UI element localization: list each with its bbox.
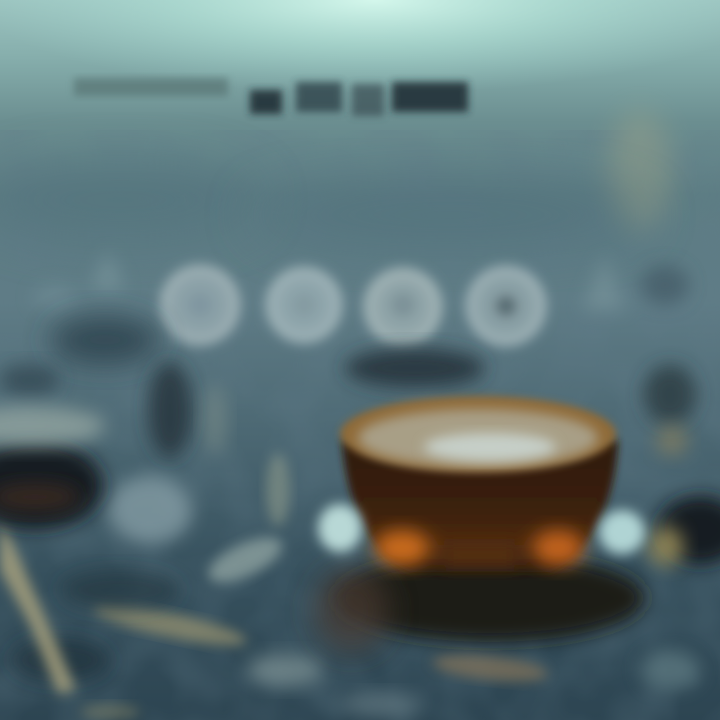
icon: circle one (164, 269, 236, 341)
icon row (33, 250, 689, 342)
right small cup (648, 496, 720, 566)
left stalk (0, 515, 76, 694)
icon: faint right marker (582, 255, 689, 310)
orange glow (374, 530, 584, 566)
background scattered leaves (0, 315, 700, 720)
glass reflection right (599, 510, 645, 554)
left cup (0, 406, 105, 529)
tea surface (358, 409, 598, 467)
cup body (342, 440, 618, 572)
cup rim (340, 396, 616, 472)
icon: circle two (270, 271, 338, 339)
icon: circle three (368, 272, 438, 342)
icon: faint left marker (33, 250, 125, 309)
glass reflection left (318, 504, 362, 552)
icon: circle four (470, 270, 542, 342)
title (74, 78, 468, 116)
saucer (314, 554, 645, 652)
tea cup (318, 396, 645, 572)
